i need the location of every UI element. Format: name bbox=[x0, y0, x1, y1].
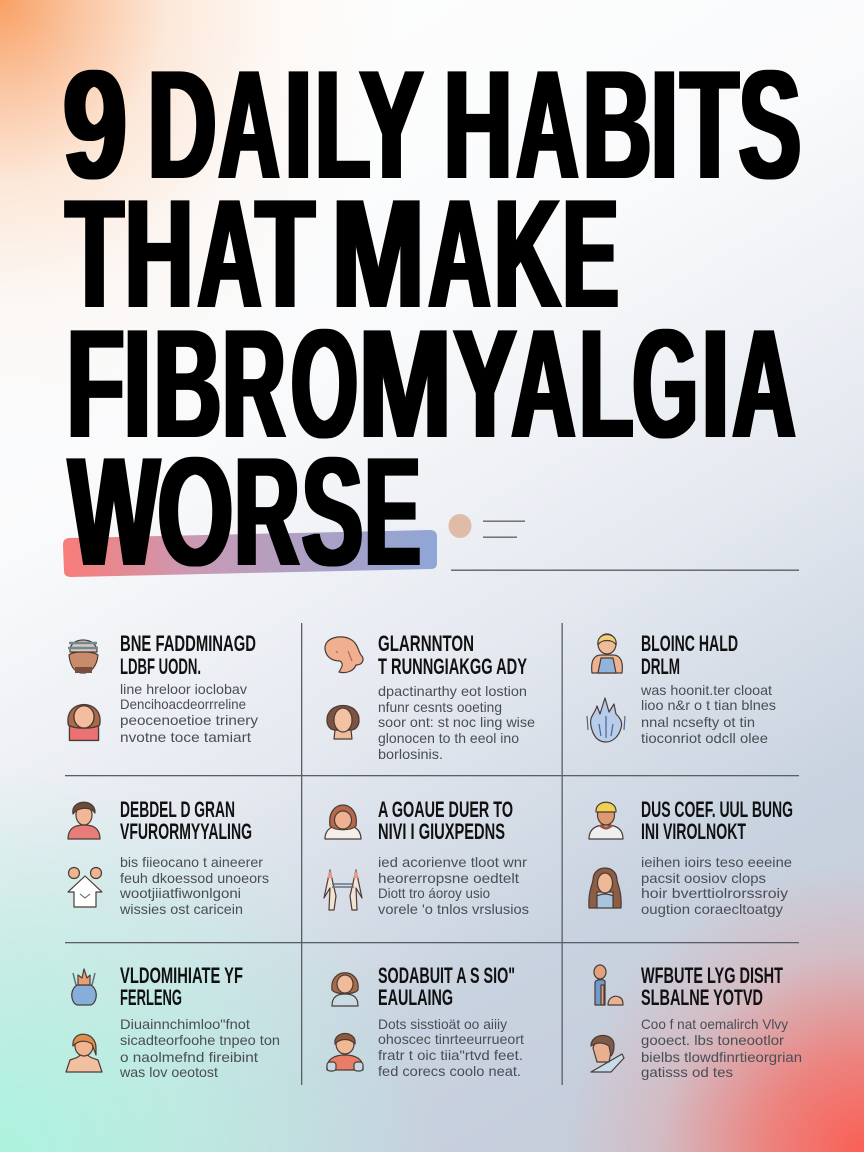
title: A bbox=[198, 167, 262, 340]
title: Y bbox=[454, 297, 516, 470]
heading: NIVI I GIUXPEDNS bbox=[378, 819, 505, 844]
body text: line hreloor ioclobav bbox=[120, 681, 247, 697]
title: S bbox=[739, 38, 801, 211]
body text: vorele 'o tnlos vrslusios bbox=[378, 901, 529, 917]
heading: SODABUIT A S SIO" bbox=[378, 963, 515, 988]
title: M bbox=[359, 297, 452, 470]
body text: wootjiiatfiwonlgoni bbox=[119, 885, 241, 901]
panel: habit 4 bbox=[68, 797, 269, 917]
title: A bbox=[428, 167, 490, 340]
body text: Diott tro áoroy usio bbox=[378, 885, 490, 901]
body text: borlosinis. bbox=[378, 746, 443, 762]
panel: habit 2 bbox=[325, 631, 535, 762]
body text: Dencihoacdeorrreline bbox=[120, 696, 246, 712]
body text: peocenoetioe trinery bbox=[120, 712, 258, 728]
title: E bbox=[563, 167, 618, 340]
body text: wissies ost caricein bbox=[119, 901, 243, 917]
title accent: dot and short lines bbox=[448, 514, 525, 538]
body text bbox=[378, 683, 535, 762]
body text: pacsit oosiov clops bbox=[641, 870, 766, 886]
heading bbox=[120, 963, 243, 1010]
heading bbox=[378, 631, 527, 679]
panel: habit 1 bbox=[68, 631, 258, 745]
body text: heorerropsne oedtelt bbox=[378, 870, 519, 886]
icon: man in profile bbox=[591, 1036, 624, 1072]
title: L bbox=[315, 38, 370, 211]
title: I bbox=[650, 38, 678, 211]
icon: blonde woman bbox=[592, 634, 622, 673]
title: T bbox=[681, 38, 738, 211]
body text: nfunr cesnts ooeting bbox=[378, 699, 502, 715]
body text bbox=[119, 854, 269, 917]
body text: soor ont: st noc ling wise bbox=[378, 714, 535, 730]
icon: brain bbox=[325, 637, 363, 673]
title: E bbox=[365, 425, 420, 598]
grid lines bbox=[65, 623, 799, 1085]
body text: ieihen ioirs teso eeeine bbox=[641, 854, 792, 870]
body text: o naolmefnd fireibint bbox=[120, 1049, 258, 1065]
title: M bbox=[332, 167, 425, 340]
title: R bbox=[222, 297, 286, 470]
title: I bbox=[702, 297, 729, 470]
body text bbox=[640, 682, 776, 746]
heading: LDBF UODN. bbox=[120, 654, 201, 679]
body text bbox=[641, 854, 792, 917]
heading: GLARNNTON bbox=[378, 631, 474, 656]
heading: FERLENG bbox=[120, 985, 182, 1010]
heading: SLBALNE YOTVD bbox=[641, 985, 763, 1010]
body text: glonocen to th eeol ino bbox=[378, 730, 519, 746]
title: I bbox=[284, 38, 312, 211]
heading: T RUNNGIAKGG ADY bbox=[378, 654, 527, 679]
heading: A GOAUE DUER TO bbox=[378, 797, 513, 822]
panel: habit 7 bbox=[66, 963, 280, 1080]
body text: was hoonit.ter clooat bbox=[640, 682, 772, 698]
body text: hoir bverttiolrorssroiy bbox=[641, 885, 788, 901]
body text: gatisss od tes bbox=[641, 1064, 733, 1080]
body text: fed corecs coolo neat. bbox=[378, 1063, 521, 1079]
body text: Dots sisstioät oo aiiiy bbox=[378, 1016, 507, 1032]
body text: tioconriot odcll olee bbox=[641, 730, 768, 746]
icon: curly-haired woman bbox=[68, 705, 100, 740]
panel: habit 8 bbox=[327, 963, 524, 1079]
body text: bis fiieocano t aineerer bbox=[120, 854, 263, 870]
title: A bbox=[512, 297, 576, 470]
body text: nvotne toce tamiart bbox=[120, 729, 251, 745]
body text bbox=[378, 1016, 524, 1079]
title: H bbox=[125, 167, 193, 340]
body text: was lov oeotost bbox=[119, 1064, 218, 1080]
title: R bbox=[234, 425, 300, 598]
title: B bbox=[154, 297, 221, 470]
title: B bbox=[583, 38, 651, 211]
icon: woman with long hair bbox=[589, 868, 621, 908]
body text: dpactinarthy eot lostion bbox=[378, 683, 527, 699]
body text bbox=[378, 854, 529, 917]
title rule bbox=[451, 570, 799, 571]
title: 9 bbox=[63, 38, 127, 211]
title: I bbox=[124, 297, 151, 470]
title: A bbox=[516, 38, 578, 211]
icon: man with long brown hair bbox=[327, 706, 359, 739]
heading: INI VIROLNOKT bbox=[641, 819, 746, 844]
heading bbox=[120, 631, 256, 679]
title: A bbox=[218, 38, 280, 211]
body text: ied acorienve tloot wnr bbox=[378, 854, 527, 870]
body text: feuh dkoessod unoeors bbox=[120, 870, 269, 886]
heading bbox=[641, 631, 738, 679]
heading: BNE FADDMINAGD bbox=[120, 631, 256, 656]
panel: habit 6 bbox=[589, 797, 793, 917]
body text: nnal ncsefty ot tin bbox=[641, 714, 755, 730]
panel: habit 5 bbox=[324, 797, 529, 917]
icon: raised arms bbox=[324, 870, 362, 910]
icon: older man standing bbox=[594, 965, 623, 1005]
body text: Coo f nat oemalirch Vlvy bbox=[641, 1016, 788, 1032]
heading bbox=[120, 797, 252, 844]
heading: VLDOMIHIATE YF bbox=[120, 963, 243, 988]
body text: ougtion coraecltoatgy bbox=[641, 901, 783, 917]
icon: auburn-haired woman bbox=[325, 805, 361, 839]
title: S bbox=[302, 425, 363, 598]
body text: ohoscec tinrteeurrueort bbox=[378, 1031, 524, 1047]
title: A bbox=[732, 297, 796, 470]
heading: EAULAING bbox=[378, 985, 453, 1010]
body text: bielbs tlowdfinrtieorgrian bbox=[641, 1049, 802, 1065]
title: H bbox=[444, 38, 512, 211]
heading bbox=[641, 963, 783, 1010]
body text bbox=[641, 1016, 802, 1080]
title: L bbox=[579, 297, 633, 470]
body text: sicadteorfoohe tnpeo ton bbox=[120, 1032, 280, 1048]
icon: blue flame spikes bbox=[587, 698, 625, 742]
heading bbox=[378, 797, 513, 844]
heading bbox=[378, 963, 515, 1010]
panel: habit 9 bbox=[591, 963, 802, 1080]
heading: DEBDEL D GRAN bbox=[120, 797, 235, 822]
icon: person with orange hair bbox=[66, 1034, 102, 1072]
body text: lioo n&r o t tian blnes bbox=[641, 697, 776, 713]
icon: man in red shirt bbox=[327, 1034, 363, 1071]
body text: Diuainnchimloo"fnot bbox=[120, 1016, 250, 1032]
panel: habit 3 bbox=[587, 631, 776, 746]
body text: gooect. lbs toneootlor bbox=[641, 1032, 784, 1048]
title: T bbox=[66, 167, 124, 340]
icon: woman with brown hair bbox=[332, 973, 358, 1006]
icon: dark-haired person bbox=[68, 802, 100, 839]
title: D bbox=[148, 38, 216, 211]
title: F bbox=[67, 297, 124, 470]
title: G bbox=[633, 297, 698, 470]
icon: hands on house bbox=[68, 868, 102, 907]
heading: BLOINC HALD bbox=[641, 631, 738, 656]
heading bbox=[641, 797, 793, 844]
title: K bbox=[494, 167, 561, 340]
heading: WFBUTE LYG DISHT bbox=[641, 963, 783, 988]
title: O bbox=[291, 297, 358, 470]
highlight swatch behind WORSE bbox=[63, 530, 437, 577]
title: T bbox=[256, 167, 315, 340]
heading: VFURORMYYALING bbox=[120, 819, 252, 844]
title: Y bbox=[360, 38, 424, 211]
icon: blue pot with flame bbox=[72, 969, 96, 1005]
body text: fratr t oic tiia"rtvd feet. bbox=[378, 1047, 523, 1063]
title: O bbox=[158, 425, 233, 598]
heading: DRLM bbox=[641, 654, 680, 679]
icon: head with bandage bbox=[68, 640, 98, 673]
body text bbox=[120, 681, 258, 745]
title: W bbox=[68, 425, 160, 598]
body text bbox=[119, 1016, 280, 1080]
title bbox=[63, 38, 801, 598]
icon: person in yellow cap bbox=[589, 802, 623, 839]
